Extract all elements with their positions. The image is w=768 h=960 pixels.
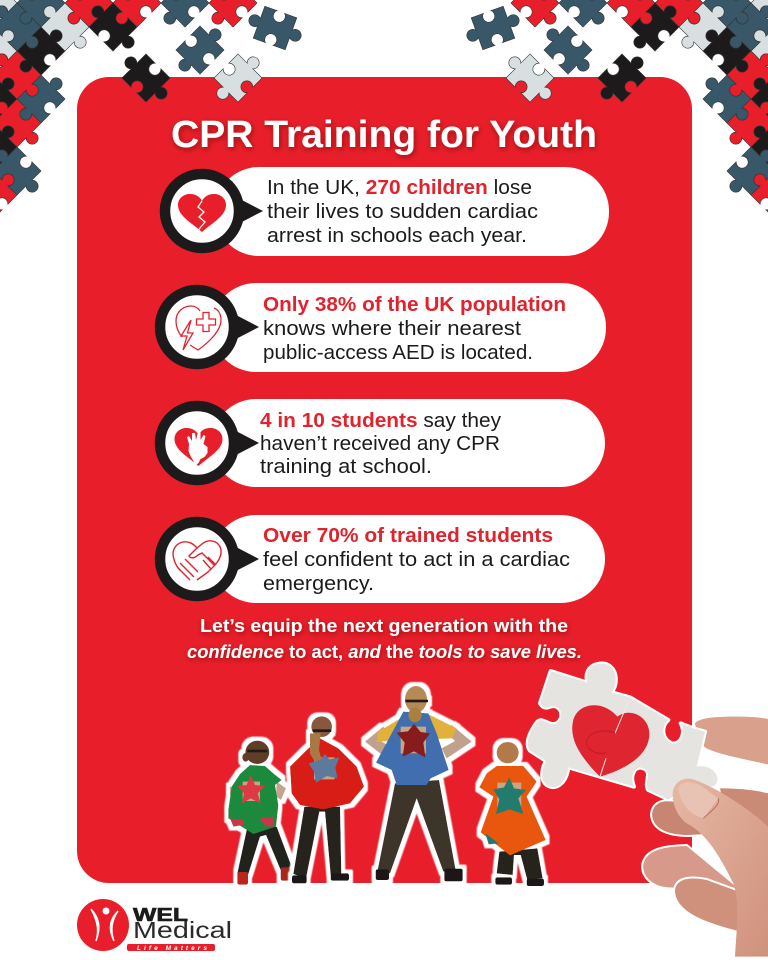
- logo wordmark: Medical: [133, 917, 232, 943]
- text: stat 1: their lives to sudden cardiac: [267, 200, 538, 223]
- text: stat 1: In the UK, 270 children lose: [267, 176, 532, 199]
- panel: red background: [77, 77, 692, 883]
- child in red cape: [290, 716, 364, 883]
- logo wordmark: [127, 905, 232, 952]
- illustration: puzzle pieces with red heart: [528, 663, 717, 799]
- text: stat 2: Only 38% of the UK population: [263, 293, 566, 316]
- closing message: confidence to act, and the tools to save lives.: [187, 641, 582, 662]
- panel: stat 2: [160, 283, 606, 372]
- puzzle pieces: [528, 663, 717, 799]
- text: stat 3: [260, 409, 502, 478]
- icon: heart with defibrillator bolt and cross: [160, 290, 259, 364]
- text: stat 1: [267, 176, 538, 247]
- text: stat 2: public-access AED is located.: [263, 341, 533, 364]
- text: stat 4: Over 70% of trained students: [263, 524, 553, 547]
- panel: stat 3: [160, 399, 605, 487]
- icon: heart with child hand: [160, 406, 259, 480]
- icon: heart handshake: [160, 522, 259, 596]
- panel: stat 4: [160, 515, 605, 603]
- illustration: children in capes: [228, 686, 546, 886]
- puzzle pieces: top left cluster: [0, 0, 307, 226]
- illustration: fingers behind the puzzle piece: [652, 717, 768, 847]
- text: stat 2: [263, 293, 566, 364]
- text: stat 4: [263, 524, 570, 595]
- closing message: [187, 615, 582, 662]
- text: stat 1: arrest in schools each year.: [267, 224, 527, 247]
- text: stat 3: haven’t received any CPR: [260, 432, 500, 455]
- child in green cape: [228, 741, 292, 885]
- panel: stat 1: [165, 167, 609, 256]
- logo mark: [77, 899, 129, 951]
- text: stat 2: knows where their nearest: [263, 317, 521, 340]
- child in blue cape: [365, 686, 472, 881]
- text: stat 4: feel confident to act in a cardiac: [263, 548, 570, 571]
- logo wordmark: WEL: [133, 905, 188, 925]
- logo wordmark: Life Matters: [137, 945, 207, 952]
- text: stat 3: 4 in 10 students say they: [260, 409, 502, 432]
- text: stat 3: training at school.: [260, 455, 432, 478]
- puzzle pieces: top right cluster: [461, 0, 768, 226]
- logo: WEL Medical: [77, 899, 232, 952]
- illustration: hand holding puzzle: [643, 779, 768, 957]
- child in orange cape: [479, 742, 546, 886]
- closing message: Let’s equip the next generation with the: [200, 615, 568, 636]
- title: CPR Training for Youth: [171, 114, 597, 156]
- red heart: [572, 705, 649, 777]
- text: stat 4: emergency.: [263, 572, 374, 595]
- icon: broken heart: [165, 174, 263, 248]
